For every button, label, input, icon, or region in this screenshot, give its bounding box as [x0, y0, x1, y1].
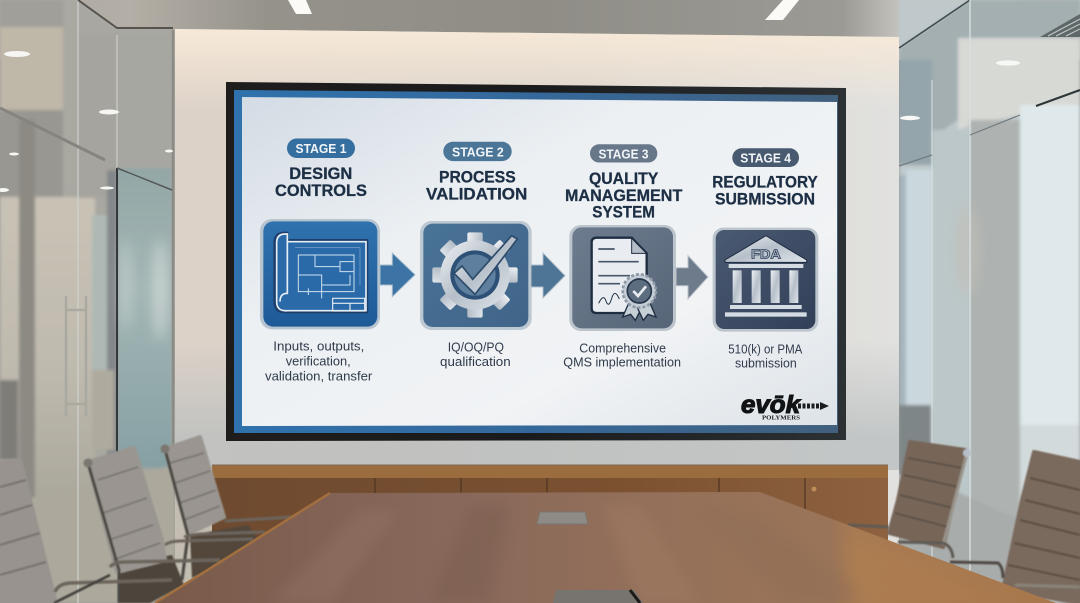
chair: far right [950, 452, 1080, 603]
stage 2 column [420, 142, 532, 369]
stage 4 description [728, 341, 803, 370]
stage 3 description: QMS implementation [563, 355, 681, 370]
stage 1 heading: CONTROLS [275, 181, 367, 200]
stage 4 heading: REGULATORY [712, 172, 818, 191]
stage 4 description: 510(k) or PMA [728, 341, 803, 356]
chair: near wall right [848, 442, 971, 558]
stage 3 description [563, 340, 681, 370]
stage 3 badge [590, 144, 657, 162]
display white panel [242, 97, 837, 426]
stage 4 badge [732, 148, 799, 167]
stage 1 description: verification, [286, 354, 351, 369]
stage 1 heading: DESIGN [289, 164, 352, 183]
icon: gear with checkmark [420, 221, 532, 330]
stage 2 heading [426, 167, 527, 203]
stage 3 badge: STAGE 3 [598, 146, 648, 161]
table cable port: front [553, 590, 643, 603]
stage 1 badge [287, 138, 355, 158]
conference table [155, 492, 1056, 603]
stage 3 heading: SYSTEM [592, 202, 655, 221]
stage 2 description: IQ/OQ/PQ [448, 340, 504, 355]
icon: blueprint [260, 219, 380, 329]
logo: evok polymers: POLYMERS [762, 414, 800, 422]
stage 1 column [260, 138, 380, 384]
stage 4 heading [712, 172, 818, 208]
arrow: stage 3 to 4 [676, 256, 708, 299]
display bezel [226, 82, 846, 441]
stage 2 description [440, 340, 511, 369]
left ceiling reflections [0, 51, 173, 192]
stage 4 description: submission [735, 355, 797, 370]
stage 2 badge: STAGE 2 [452, 145, 504, 160]
ceiling [0, 0, 1080, 60]
icon: certified document [569, 225, 676, 331]
icon: FDA building [713, 228, 818, 332]
logo: evok polymers [741, 391, 829, 422]
left chairs [0, 437, 293, 603]
chair: far left [0, 460, 56, 603]
ceiling lights [288, 0, 799, 20]
right glass partition [899, 0, 1080, 603]
left glass partition [0, 0, 175, 603]
stage 3 column [563, 144, 683, 370]
left glass soft reflections [121, 240, 167, 340]
wall-mounted display [226, 82, 846, 441]
stage 1 description: validation, transfer [265, 369, 373, 384]
stage 1 description: Inputs, outputs, [273, 339, 364, 354]
chair: near wall left [160, 437, 293, 580]
right glass soft reflection [955, 205, 979, 295]
stage 2 heading: VALIDATION [426, 184, 527, 203]
left glass frames and door handles [0, 0, 173, 603]
stage 4 heading: SUBMISSION [715, 189, 815, 208]
display blue border [234, 90, 838, 433]
stage 3 heading: QUALITY [589, 169, 659, 188]
stage 1 badge: STAGE 1 [296, 141, 346, 156]
logo: evok polymers: evōk [741, 391, 801, 419]
back wall [175, 29, 899, 603]
stage 4 badge: STAGE 4 [740, 151, 792, 166]
stage 3 heading: MANAGEMENT [565, 186, 683, 205]
stage 4 column [712, 148, 818, 370]
stage 1 description [265, 339, 373, 384]
sideboard cabinet [212, 465, 888, 560]
stage 1 heading [275, 164, 367, 200]
stage 2 heading: PROCESS [439, 167, 516, 186]
right chairs [848, 442, 1080, 603]
stage 2 description: qualification [440, 354, 511, 369]
icon: FDA building: FDA [751, 246, 781, 261]
chair: middle left [54, 448, 220, 603]
right glass frames, vent and lights [899, 0, 1080, 603]
arrow: stage 1 to 2 [380, 253, 415, 297]
table cable port: back [537, 512, 588, 524]
stage 3 heading [565, 169, 683, 221]
arrow: stage 2 to 3 [531, 253, 565, 298]
stage 3 description: Comprehensive [579, 340, 666, 355]
stage 2 badge [443, 142, 512, 161]
